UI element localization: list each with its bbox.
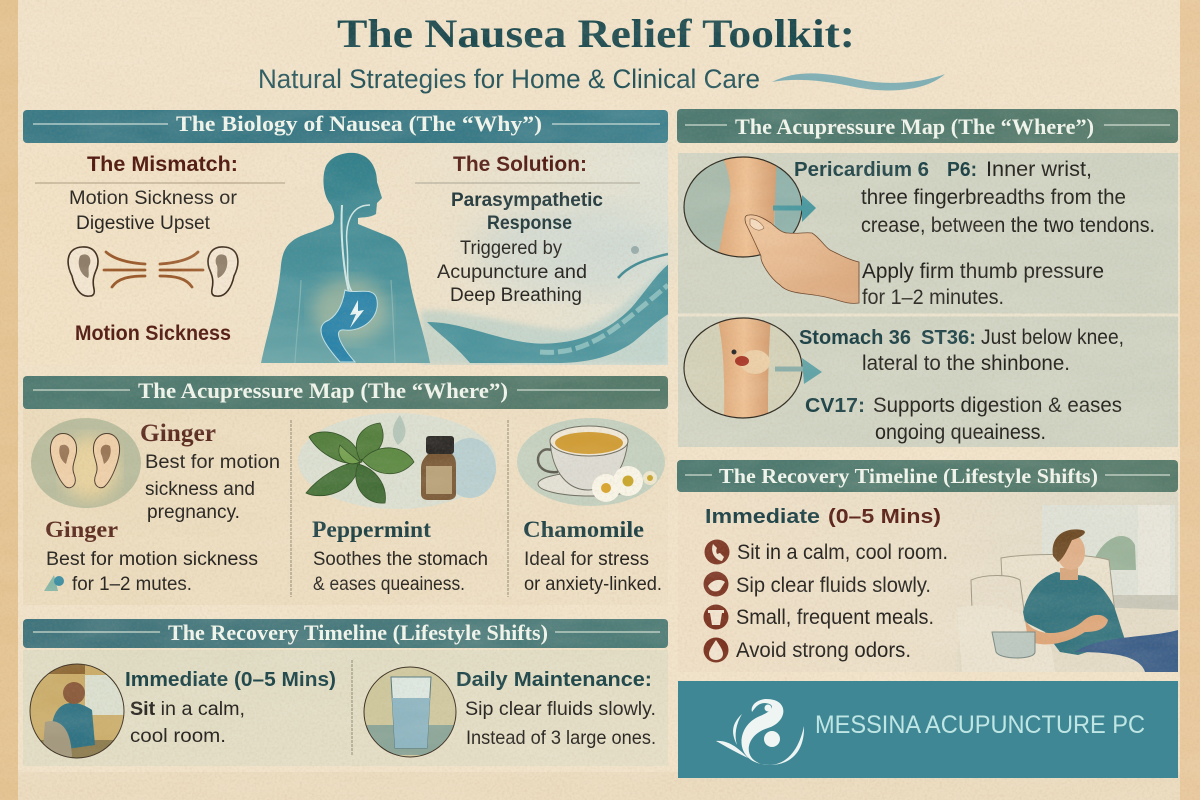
heading bar	[23, 619, 668, 648]
chamomile column: or anxiety-linked.	[524, 574, 662, 595]
solution column: Acupuncture and	[437, 262, 587, 283]
peppermint column	[298, 413, 496, 595]
icon: knee with red point	[684, 315, 822, 420]
panel: recovery timeline right	[677, 460, 1178, 672]
solution column: Triggered by	[460, 238, 562, 259]
panel: biology of nausea	[23, 110, 670, 365]
immediate list: Sip clear fluids slowly.	[736, 574, 931, 597]
immediate list: Sit in a calm, cool room.	[737, 541, 948, 564]
icon: seated person oval	[30, 664, 125, 760]
icon: ears with clashing arrows	[68, 247, 238, 296]
panel: acupressure map left	[23, 376, 668, 605]
chamomile column	[517, 418, 665, 595]
panel: recovery timeline left	[23, 619, 668, 766]
forearm	[1025, 615, 1108, 644]
P6 point	[684, 155, 1155, 309]
ginger column: Ginger	[45, 517, 118, 542]
ST36 and CV17 points: ongoing queainess.	[875, 421, 1046, 444]
immediate column: Immediate (0–5 Mins)	[125, 669, 336, 691]
solution column: The Solution:	[453, 153, 587, 176]
heading bar	[677, 460, 1178, 492]
peppermint column: Soothes the stomach	[313, 549, 488, 570]
heading bar: The Recovery Timeline (Lifestyle Shifts)	[719, 464, 1098, 488]
ST36 and CV17 points: Just below knee,	[981, 326, 1124, 349]
icon: mint and oil bottle	[298, 413, 496, 509]
icon: small teal marker	[44, 575, 64, 591]
icon: glass of water oval	[364, 667, 456, 757]
solution column	[415, 153, 640, 306]
peppermint column: Peppermint	[312, 517, 431, 542]
P6 point: for 1–2 minutes.	[862, 286, 1004, 309]
immediate column: cool room.	[130, 726, 226, 747]
mismatch column: Motion Sickness or	[69, 188, 238, 209]
icon: wrist with thumb pressure	[684, 155, 859, 303]
ST36 and CV17 points: Supports digestion & eases	[873, 394, 1122, 417]
ginger column: for 1–2 mutes.	[72, 574, 192, 595]
subtitle: Natural Strategies for Home & Clinical Care	[258, 64, 760, 94]
P6 point: Apply firm thumb pressure	[862, 260, 1104, 283]
ST36 and CV17 points: Stomach 36	[799, 327, 911, 349]
immediate list: Small, frequent meals.	[736, 606, 934, 629]
heading bar: The Biology of Nausea (The “Why”)	[176, 111, 542, 136]
P6 point: crease, between the two tendons.	[861, 214, 1155, 237]
heading bar	[677, 109, 1178, 143]
immediate list: Avoid strong odors.	[736, 639, 911, 662]
chamomile column: Chamomile	[523, 517, 644, 542]
ginger column: Ginger	[140, 420, 216, 447]
solution column: Deep Breathing	[450, 285, 582, 306]
solution column: Response	[487, 213, 572, 234]
heading bar	[23, 110, 668, 143]
P6 point: P6:	[947, 159, 977, 181]
icon: human silhouette with stomach	[261, 153, 430, 363]
ginger column: Best for motion	[145, 452, 280, 473]
heading bar: The Acupressure Map (The “Where”)	[735, 114, 1094, 139]
mismatch column: Motion Sickness	[75, 322, 231, 345]
heading bar: The Recovery Timeline (Lifestyle Shifts)	[168, 620, 548, 645]
logo mark	[716, 699, 804, 765]
chamomile column: Ideal for stress	[524, 549, 649, 570]
daily maintenance column: Sip clear fluids slowly.	[465, 699, 656, 720]
ST36 and CV17 points: CV17:	[805, 395, 865, 417]
ginger column: pregnancy.	[147, 502, 240, 523]
icon: phone badge	[704, 540, 730, 564]
icon: meal pot badge	[704, 604, 728, 630]
ST36 and CV17 points	[684, 315, 1124, 444]
mismatch column: The Mismatch:	[87, 153, 238, 176]
watercolor wash	[470, 205, 670, 295]
daily maintenance column	[364, 667, 656, 757]
mismatch column: Digestive Upset	[76, 213, 211, 234]
ginger column: Best for motion sickness	[46, 549, 258, 570]
torso	[1023, 572, 1125, 655]
brush swoosh	[772, 73, 945, 90]
ginger column	[31, 418, 280, 595]
icon: sipping badge	[704, 572, 728, 596]
immediate column	[30, 664, 336, 760]
wave illustration	[421, 246, 670, 365]
brand banner: MESSINA ACUPUNCTURE PC	[815, 711, 1145, 739]
brand banner	[678, 681, 1178, 778]
immediate list: (0–5 Mins)	[828, 506, 941, 528]
icon: drop badge	[704, 638, 728, 662]
jeans	[1075, 630, 1178, 672]
icon: ears circle	[31, 418, 141, 508]
P6 point: three fingerbreadths from the	[861, 186, 1126, 209]
ginger column: sickness and	[145, 479, 255, 500]
illustration: man resting on sofa	[957, 505, 1178, 672]
immediate list	[704, 506, 948, 662]
heading bar	[23, 376, 668, 409]
immediate column: Sit in a calm,	[130, 699, 245, 720]
daily maintenance column: Daily Maintenance:	[456, 669, 652, 691]
ST36 and CV17 points: ST36:	[921, 327, 976, 349]
heading bar: The Acupressure Map (The “Where”)	[138, 378, 508, 403]
P6 point: Inner wrist,	[986, 158, 1092, 181]
icon: tea cup and daisies	[517, 418, 665, 506]
mismatch column	[35, 153, 285, 345]
mug	[992, 632, 1035, 658]
title: The Nausea Relief Toolkit:	[337, 11, 855, 56]
head	[1060, 568, 1078, 580]
peppermint column: & eases queainess.	[313, 574, 465, 595]
immediate list: Immediate	[705, 506, 820, 528]
ST36 and CV17 points: lateral to the shinbone.	[862, 352, 1070, 375]
P6 point: Pericardium 6	[794, 159, 929, 181]
window	[1042, 505, 1175, 605]
panel: acupressure map right	[677, 109, 1178, 447]
sofa	[1115, 608, 1178, 620]
solution column: Parasympathetic	[451, 190, 603, 211]
daily maintenance column: Instead of 3 large ones.	[466, 728, 656, 749]
